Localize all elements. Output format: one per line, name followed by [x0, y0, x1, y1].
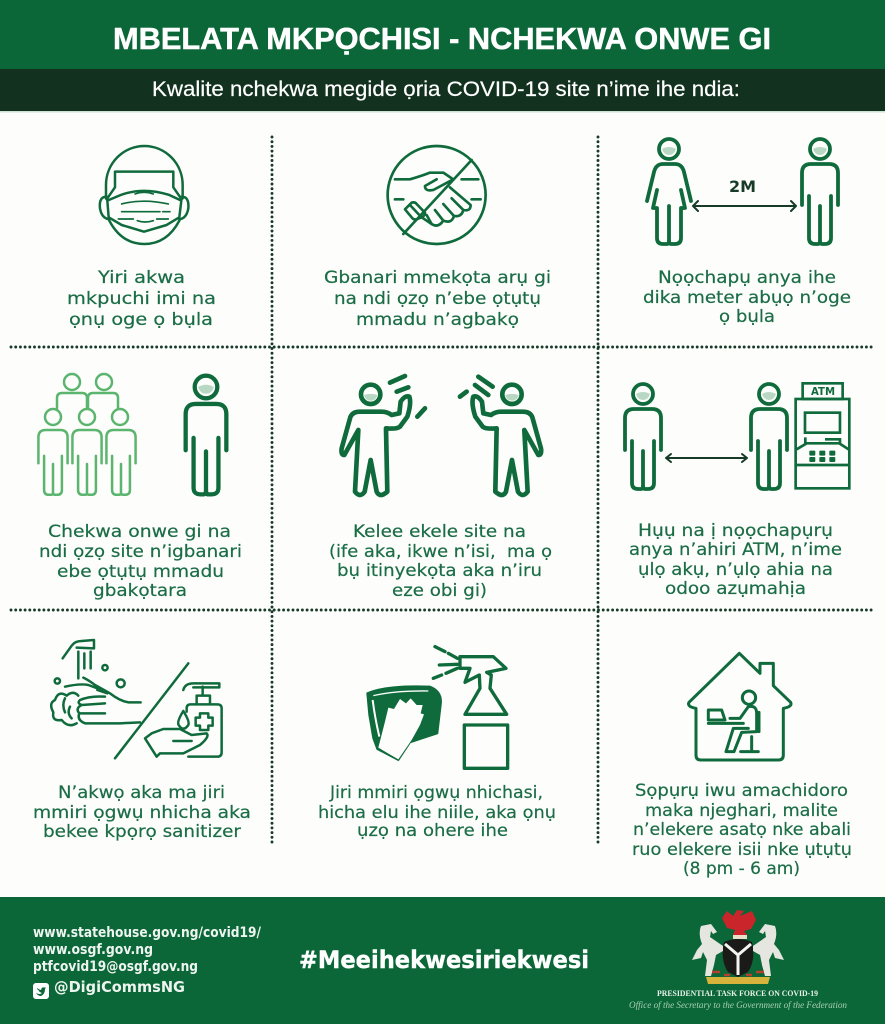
caption: N’akwọ aka ma jiri: [58, 783, 225, 803]
icon: crossed-out handshake: [388, 146, 486, 244]
caption: Gbanari mmekọta arụ gi: [324, 268, 551, 288]
caption: mkpuchi imi na: [67, 289, 216, 309]
icon: man with mask: [802, 139, 838, 244]
panel: wash hands: [33, 640, 251, 842]
panel: two metre distance: [643, 139, 851, 327]
shield: [723, 939, 753, 977]
left horse: [692, 924, 723, 976]
header band: [0, 0, 885, 112]
caption: ọ bụla: [719, 307, 775, 327]
panel: curfew stay home: [632, 653, 852, 879]
icon: ATM machine: [796, 383, 849, 488]
caption: dika meter abụọ n’oge: [643, 288, 851, 308]
panel: greet from a distance: [329, 376, 552, 601]
icon: crowd: [38, 374, 136, 495]
task force label: PRESIDENTIAL TASK FORCE ON COVID-19: [657, 989, 818, 998]
caption: ụzọ na ohere ihe: [357, 821, 508, 841]
caption: bekee kpọrọ sanitizer: [43, 822, 241, 842]
icon: masked man apart: [186, 376, 226, 494]
caption: na ndi ọzọ n’ebe ọtụtụ: [334, 289, 541, 309]
eagle: [722, 910, 756, 935]
caption: bụ itinyekọta aka n’iru: [337, 561, 542, 581]
icon: waving man left: [341, 376, 425, 495]
caption: maka njeghari, malite: [645, 801, 838, 821]
caption: Chekwa onwe gi na: [48, 522, 231, 542]
panel: disinfect surfaces: [318, 647, 556, 841]
caption: [67, 268, 216, 330]
icon: person working at home: [689, 653, 791, 760]
caption: odoo azụmahịa: [665, 579, 806, 599]
caption: mmadu n’agbakọ: [356, 310, 519, 330]
caption: [324, 268, 551, 330]
panel: avoid crowds: [38, 374, 242, 601]
icon: woman with mask: [647, 139, 691, 244]
label: 2M: 2M: [729, 177, 756, 196]
office label: Office of the Secretary to the Government of the Federation: [629, 1000, 847, 1011]
caption: ụlọ akụ, n’ụlọ ahia na: [638, 560, 833, 580]
icon: twitter: [33, 983, 49, 999]
caption: eze obi gi): [392, 581, 487, 601]
subtitle: Kwalite nchekwa megide ọria COVID-19 site n’ime ihe ndia:: [152, 78, 740, 101]
icon: ATM machine: ATM: [811, 385, 835, 398]
icon: first man in queue: [625, 384, 661, 489]
hashtag: #Meeihekwesiriekwesi: [299, 946, 589, 974]
panel: no handshake: [324, 146, 551, 330]
crest: coat of arms: [692, 910, 784, 984]
crest flowers: [712, 972, 764, 975]
caption: [643, 268, 851, 327]
right horse: [753, 924, 784, 976]
caption: [39, 522, 242, 601]
caption: [318, 783, 556, 841]
twitter handle: @DigiCommsNG: [54, 978, 185, 996]
icon: hand washing and sanitizer: [51, 640, 222, 758]
caption: gbakọtara: [93, 581, 187, 601]
caption: anya n’ahiri ATM, n’ime: [629, 540, 842, 560]
caption: ebe ọtụtụ mmadu: [57, 562, 224, 582]
title: MBELATA MKPỌCHISI - NCHEKWA ONWE GI: [113, 21, 771, 56]
caption: [629, 521, 842, 599]
icon: second man in queue: [751, 384, 787, 489]
caption: Yiri akwa: [97, 268, 185, 288]
caption: Sọpụrụ iwu amachidoro: [635, 781, 848, 801]
panel: distance at ATM: [625, 383, 849, 599]
ribbon: [706, 977, 770, 984]
caption: ruo elekere isii nke ụtụtụ: [632, 840, 852, 860]
icon: cloth and spray bottle: [367, 647, 508, 768]
caption: (8 pm - 6 am): [683, 859, 800, 879]
icon: waving man right: [460, 377, 541, 495]
caption: Kelee ekele site na: [353, 522, 526, 542]
caption: hicha elu ihe niile, aka ọnụ: [318, 803, 556, 823]
pall: [725, 944, 751, 975]
footer contact links: ptfcovid19@osgf.gov.ng: [33, 959, 198, 975]
caption: Hụụ na ị nọọchapụrụ: [638, 521, 833, 541]
footer contact links: [33, 925, 262, 975]
footer contact links: www.osgf.gov.ng: [33, 942, 153, 958]
caption: ndi ọzọ site n’igbanari: [39, 542, 242, 562]
caption: n’elekere asatọ nke abali: [633, 820, 851, 840]
footer band: [0, 897, 885, 1024]
caption: (ife aka, ikwe n’isi, ma ọ: [329, 542, 552, 562]
caption: [329, 522, 552, 601]
icon: face mask: [100, 146, 188, 244]
arrow: distance: [693, 201, 796, 211]
caption: Jiri mmiri ọgwụ nhichasi,: [329, 783, 543, 803]
caption: [632, 781, 852, 879]
caption: ọnụ oge ọ bụla: [69, 310, 213, 330]
caption: mmiri ọgwụ nhicha aka: [33, 803, 251, 823]
caption: Nọọchapụ anya ihe: [658, 268, 836, 288]
arrow: queue distance: [666, 454, 747, 462]
footer contact links: www.statehouse.gov.ng/covid19/: [33, 925, 262, 941]
caption: [33, 783, 251, 842]
panel: face mask: [67, 146, 216, 330]
